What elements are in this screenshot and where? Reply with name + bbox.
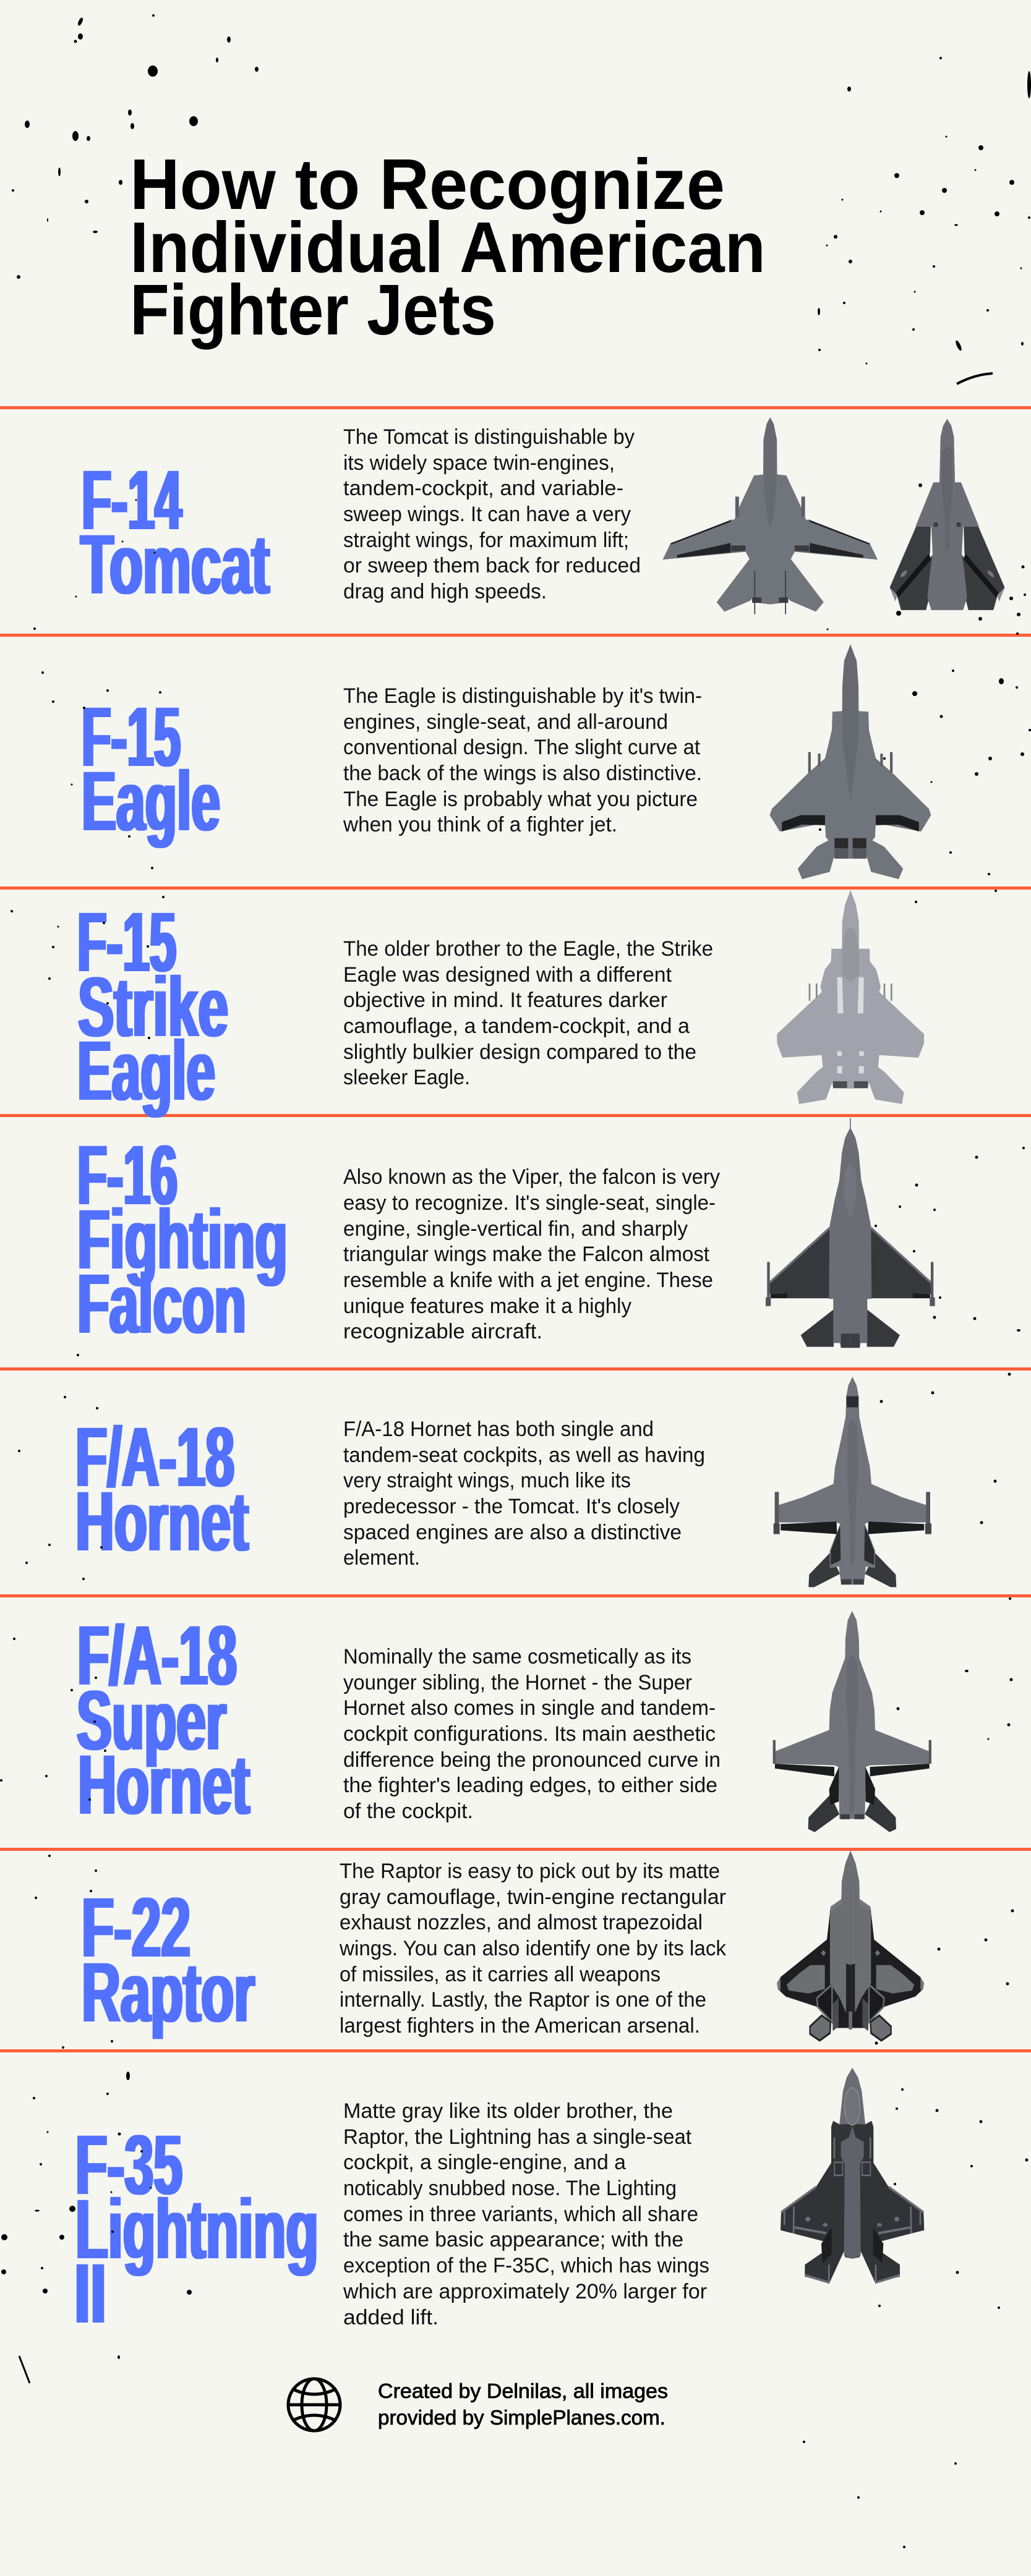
text: Raptor description: internally. Lastly, the Raptor is one of the xyxy=(340,1988,706,2012)
text: F-16 description xyxy=(343,1165,720,1343)
text: credit: Created by Delnilas, all images xyxy=(378,2379,668,2402)
text: F-16 description: unique features make it a highly xyxy=(343,1294,631,1318)
icon: F-14 wings forward xyxy=(662,417,878,614)
text: Raptor description: wings. You can also identify one by its lack xyxy=(339,1937,727,1960)
panel: F-15 Eagle xyxy=(82,644,931,879)
text: F-35 description: noticably snubbed nose. The Lighting xyxy=(343,2177,677,2200)
text: F-15 description: the back of the wings is also distinctive. xyxy=(343,762,702,785)
text: F-14 description: The Tomcat is distinguishable by xyxy=(343,425,635,449)
text: F-15 description: engines, single-seat, and all-around xyxy=(343,710,668,734)
title: Fighter Jets xyxy=(130,270,496,350)
text: F-14 description: drag and high speeds. xyxy=(343,580,547,603)
heading: F-15 Eagle: Eagle xyxy=(82,754,220,849)
panel: F-35 Lightning II xyxy=(74,2067,924,2341)
icon: F-15 Eagle jet xyxy=(770,644,931,879)
text: F-35 description xyxy=(343,2099,709,2329)
heading: F-22 Raptor xyxy=(82,1881,255,2040)
text: F-14 description xyxy=(343,425,641,603)
heading: F-15 Eagle: F-15 xyxy=(82,690,181,784)
text: F-14 description: sweep wings. It can have a very xyxy=(343,503,631,526)
heading: F-22 Raptor: Raptor xyxy=(82,1945,255,2040)
heading: F-14 Tomcat: F-14 xyxy=(82,453,182,548)
heading: F-22 Raptor: F-22 xyxy=(82,1881,190,1975)
heading: F-35 Lightning II xyxy=(74,2118,319,2341)
icon: F-15 Strike Eagle jet xyxy=(777,890,924,1104)
text: F-15 description: conventional design. The slight curve at xyxy=(343,736,701,759)
text: F-35 description: exception of the F-35C, which has wings xyxy=(343,2254,709,2277)
text: F-35 description: Raptor, the Lightning has a single-seat xyxy=(343,2125,692,2149)
text: Super Hornet description: Nominally the same cosmetically as its xyxy=(343,1645,691,1668)
icon: F-22 Raptor jet xyxy=(777,1850,924,2041)
heading: F-15 Strike Eagle: Strike xyxy=(78,960,228,1055)
text: Raptor description: largest fighters in the American arsenal. xyxy=(340,2014,700,2038)
text: credit: provided by SimplePlanes.com. xyxy=(378,2406,665,2429)
icon: F/A-18 Hornet jet xyxy=(774,1377,931,1587)
panel: F-16 Fighting Falcon xyxy=(77,1118,935,1351)
text: F-15 description xyxy=(343,684,702,836)
icon: globe xyxy=(288,2379,340,2431)
text: F-35 description: which are approximately 20% larger for xyxy=(343,2280,707,2303)
text: F-14 description: straight wings, for maximum lift; xyxy=(343,529,629,552)
icon: F-14 wings swept xyxy=(890,419,1004,610)
text: F-35 description: added lift. xyxy=(343,2306,438,2329)
text: F-16 description: triangular wings make the Falcon almost xyxy=(343,1243,710,1266)
heading: F/A-18 Super Hornet xyxy=(77,1609,250,1832)
text: F-14 description: tandem-cockpit, and variable- xyxy=(343,477,623,500)
panel: F-15 Strike Eagle xyxy=(77,890,924,1118)
footer credit xyxy=(288,2379,668,2431)
text: Super Hornet description: difference being the pronounced curve in xyxy=(343,1748,721,1772)
text: F-15 description: when you think of a fighter jet. xyxy=(343,813,617,836)
text: Hornet description: F/A-18 Hornet has both single and xyxy=(343,1418,654,1441)
text: Super Hornet description: Hornet also comes in single and tandem- xyxy=(343,1696,716,1720)
text: Hornet description: predecessor - the Tomcat. It's closely xyxy=(343,1495,680,1518)
panel: F/A-18 Super Hornet xyxy=(77,1609,931,1832)
heading: F-16 Fighting Falcon: Fighting xyxy=(77,1192,288,1287)
text: Super Hornet description: cockpit configurations. Its main aesthetic xyxy=(343,1722,716,1746)
heading: F-14 Tomcat xyxy=(80,453,270,612)
text: F-16 description: resemble a knife with a jet engine. These xyxy=(343,1269,713,1292)
text: F-35 description: Matte gray like its older brother, the xyxy=(343,2099,673,2123)
heading: F-15 Strike Eagle xyxy=(77,895,228,1118)
text: Super Hornet description xyxy=(343,1645,721,1823)
text: F-16 description: engine, single-vertical fin, and sharply xyxy=(343,1217,688,1241)
text: Raptor description: gray camouflage, twin-engine rectangular xyxy=(340,1885,726,1909)
text: F-15 description: The Eagle is probably what you picture xyxy=(343,788,698,811)
text: F-16 description: easy to recognize. It's single-seat, single- xyxy=(343,1191,716,1215)
title: Individual American xyxy=(130,207,766,287)
text: Hornet description: very straight wings, much like its xyxy=(343,1469,631,1492)
text: Hornet description xyxy=(343,1418,705,1570)
text: Strike Eagle description: sleeker Eagle. xyxy=(343,1066,470,1089)
heading: F-16 Fighting Falcon: F-16 xyxy=(77,1128,178,1223)
panel: F/A-18 Hornet xyxy=(75,1377,931,1587)
heading: F-16 Fighting Falcon: Falcon xyxy=(77,1257,246,1351)
text: Strike Eagle description: objective in mind. It features darker xyxy=(343,988,667,1012)
heading: F-15 Strike Eagle: F-15 xyxy=(77,895,176,990)
heading: F/A-18 Super Hornet: Hornet xyxy=(78,1738,250,1832)
text: Super Hornet description: of the cockpit. xyxy=(343,1800,473,1823)
heading: F-14 Tomcat: Tomcat xyxy=(80,517,270,612)
heading: F/A-18 Hornet xyxy=(75,1410,249,1569)
panel: F-14 Tomcat xyxy=(80,417,1004,614)
text: F-15 description: The Eagle is distinguishable by it's twin- xyxy=(343,684,702,708)
icon: F/A-18 Super Hornet jet xyxy=(773,1611,931,1832)
heading: F-15 Eagle xyxy=(82,690,220,849)
text: Raptor description: The Raptor is easy to pick out by its matte xyxy=(340,1860,720,1883)
text: Raptor description: of missiles, as it carries all weapons xyxy=(340,1963,661,1986)
text: Strike Eagle description: The older brother to the Eagle, the Strike xyxy=(343,937,713,961)
text: F-16 description: Also known as the Viper, the falcon is very xyxy=(343,1165,720,1189)
heading: F/A-18 Hornet: Hornet xyxy=(75,1474,249,1569)
panel: F-22 Raptor xyxy=(82,1850,924,2041)
text: Strike Eagle description xyxy=(343,937,713,1089)
text: Hornet description: element. xyxy=(343,1546,420,1570)
text: F-14 description: or sweep them back for reduced xyxy=(343,554,641,577)
heading: F-16 Fighting Falcon xyxy=(77,1128,288,1351)
heading: F-15 Strike Eagle: Eagle xyxy=(77,1024,215,1118)
text: Super Hornet description: the fighter's leading edges, to either side xyxy=(343,1774,717,1797)
heading: F/A-18 Hornet: F/A-18 xyxy=(75,1410,234,1505)
text: Strike Eagle description: slightly bulkier design compared to the xyxy=(343,1040,696,1064)
title: How to Recognize xyxy=(130,144,725,224)
text: credit xyxy=(378,2379,668,2429)
text: F-35 description: the same basic appearance; with the xyxy=(343,2228,683,2251)
text: Raptor description xyxy=(339,1860,727,2038)
text: F-14 description: its widely space twin-engines, xyxy=(343,451,615,475)
text: Hornet description: tandem-seat cockpits, as well as having xyxy=(343,1443,705,1467)
heading: F/A-18 Super Hornet: Super xyxy=(77,1673,226,1768)
heading: F/A-18 Super Hornet: F/A-18 xyxy=(77,1609,237,1703)
text: F-16 description: recognizable aircraft. xyxy=(343,1320,542,1343)
title xyxy=(130,144,766,350)
text: Strike Eagle description: Eagle was designed with a different xyxy=(343,963,672,987)
text: Raptor description: exhaust nozzles, and almost trapezoidal xyxy=(340,1911,703,1934)
icon: F-16 jet xyxy=(766,1118,935,1348)
icon: F-35 Lightning II jet xyxy=(781,2067,924,2283)
text: F-35 description: comes in three variants, which all share xyxy=(343,2203,698,2226)
text: Strike Eagle description: camouflage, a tandem-cockpit, and a xyxy=(343,1014,690,1038)
heading: F-35 Lightning II: II xyxy=(74,2247,106,2341)
text: Super Hornet description: younger sibling, the Hornet - the Super xyxy=(343,1671,692,1694)
heading: F-35 Lightning II: F-35 xyxy=(75,2118,182,2213)
heading: F-35 Lightning II: Lightning xyxy=(75,2182,319,2277)
text: F-35 description: cockpit, a single-engine, and a xyxy=(343,2151,626,2174)
text: Hornet description: spaced engines are also a distinctive xyxy=(343,1521,682,1544)
